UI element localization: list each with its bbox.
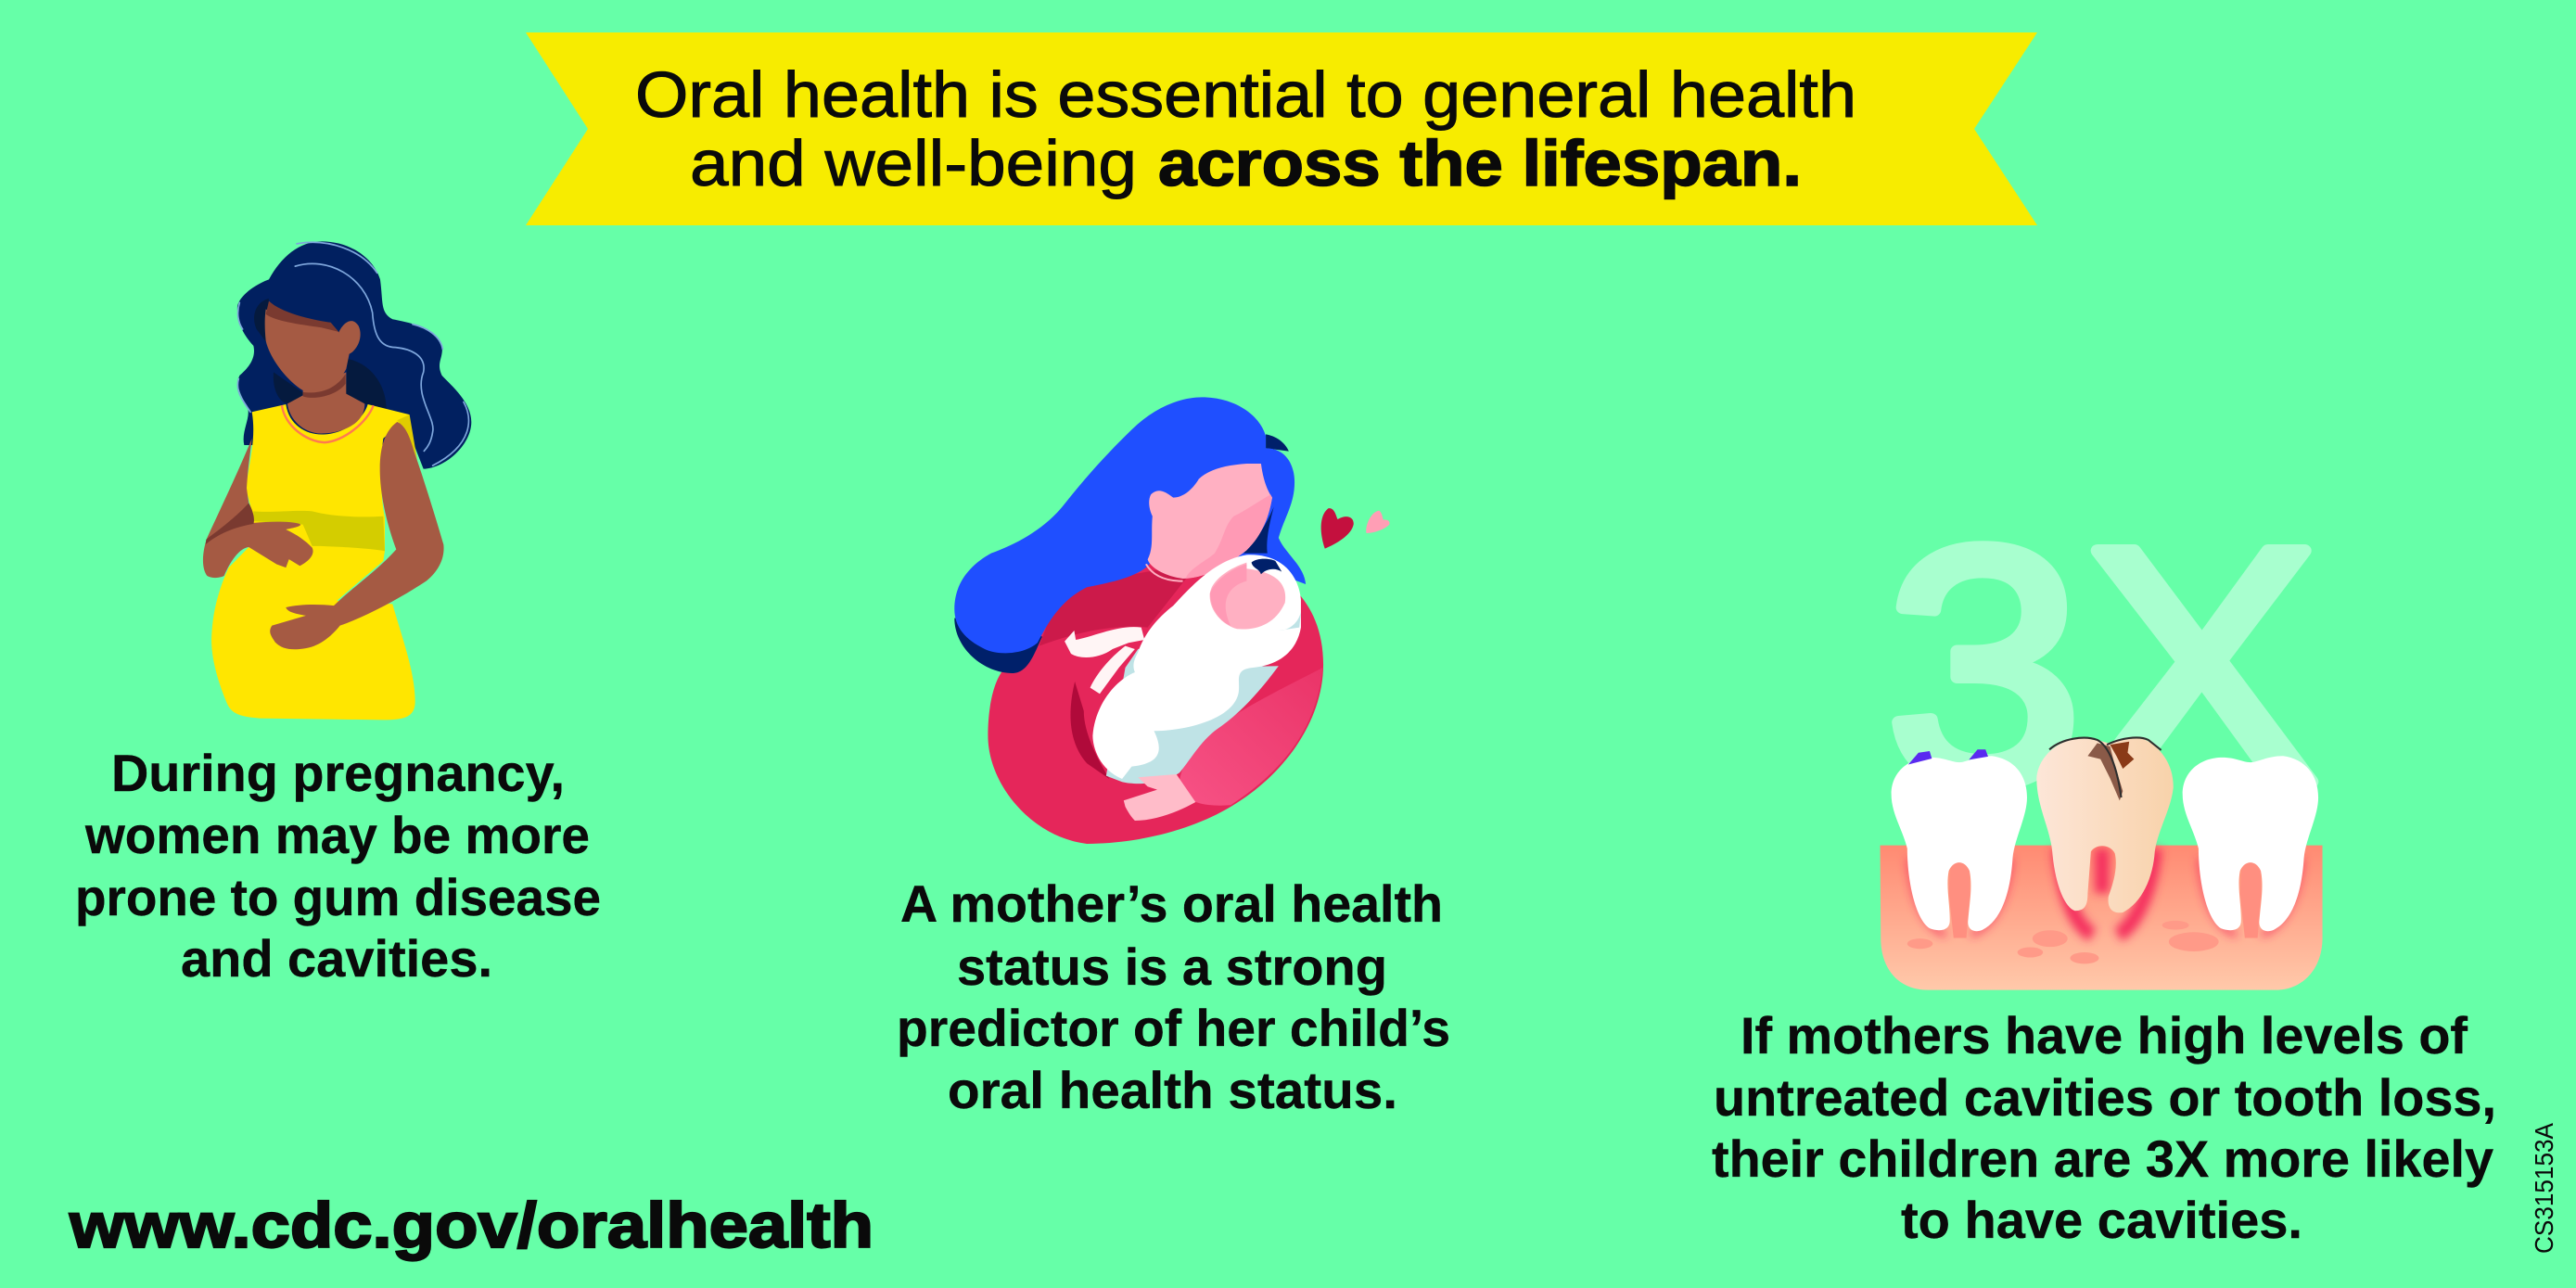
text: mother's status: A mother’s oral health: [900, 874, 1443, 933]
text: pregnancy: prone to gum disease: [75, 868, 601, 926]
text: mother's status: oral health status.: [948, 1061, 1397, 1119]
title: [635, 58, 1856, 199]
text: 3X more likely: If mothers have high levels of: [1741, 1006, 2468, 1065]
icon: dark heart: [1321, 508, 1354, 549]
text: mother's status: status is a strong: [957, 937, 1387, 996]
text: 3X more likely: their children are 3X more likely: [1712, 1129, 2493, 1188]
text: 3X more likely: untreated cavities or tooth loss,: [1714, 1068, 2496, 1127]
text: mother's status: [897, 874, 1450, 1119]
publication code: CS315153A: [2530, 1123, 2558, 1254]
text: pregnancy: and cavities.: [181, 929, 492, 988]
right healthy tooth: [2183, 756, 2318, 931]
title: and well-being: [690, 127, 1137, 199]
banner: title ribbon: [526, 32, 2037, 225]
icon: light heart: [1366, 511, 1390, 533]
text: mother's status: predictor of her child’s: [897, 999, 1450, 1057]
illustration: teeth and gums: [1881, 737, 2323, 990]
decayed centre tooth: [2036, 737, 2174, 912]
large faded 3X: 3X: [1885, 478, 2319, 853]
cavity marks: [1908, 749, 1988, 764]
text: 3X more likely: to have cavities.: [1901, 1191, 2302, 1249]
illustration: pregnant woman: [203, 241, 471, 720]
title: Oral health is essential to general health: [635, 58, 1856, 131]
title: across the lifespan.: [1158, 127, 1802, 199]
left healthy tooth: [1892, 756, 2027, 931]
text: 3X more likely: [1712, 1006, 2496, 1249]
website url: www.cdc.gov/oralhealth: [69, 1190, 874, 1261]
text: pregnancy: [75, 744, 601, 988]
illustration: mother and baby: [954, 397, 1390, 844]
text: pregnancy: During pregnancy,: [111, 744, 565, 802]
text: pregnancy: women may be more: [84, 806, 590, 864]
